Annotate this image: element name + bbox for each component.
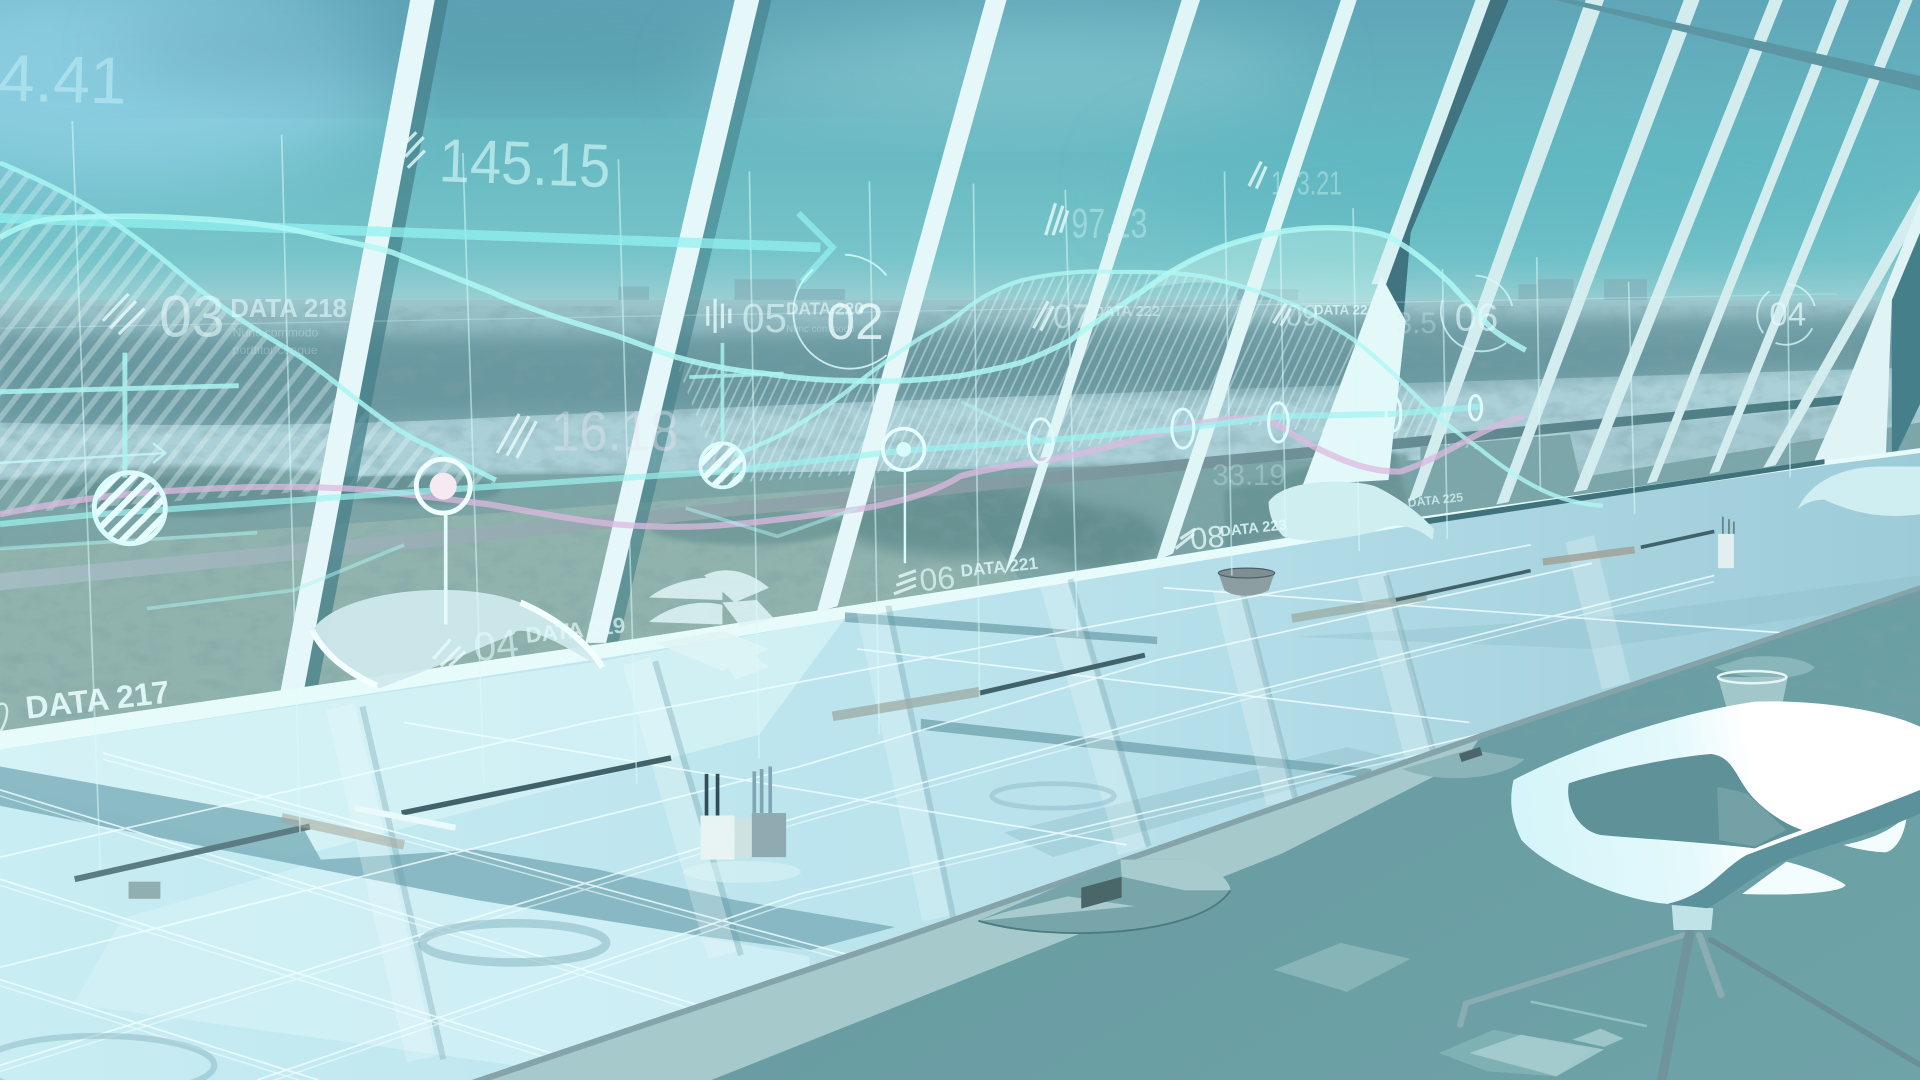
crosshair middle (689, 343, 784, 441)
label: 05 DATA 220: DATA 220 (786, 299, 864, 319)
circle gauge 04 (1757, 284, 1815, 345)
waste basket (1718, 671, 1788, 708)
node: hatched middle (700, 443, 744, 487)
label: 05 DATA 220 (742, 295, 864, 341)
readout: 33.19: 33.19 (1212, 459, 1286, 492)
table top (0, 448, 1920, 1080)
label: 04 DATA 219: DATA 219 (524, 613, 626, 648)
label: 06 DATA 221: 06 (918, 559, 957, 598)
falling curve (0, 163, 496, 480)
label: DATA 217: DATA 217 (24, 674, 171, 726)
chair opening (1568, 754, 1802, 848)
label: 04 DATA 219 (471, 613, 626, 670)
desk accessories: pen holders (683, 767, 801, 883)
table dark band (0, 767, 895, 950)
readout: 4.41: 4.41 (0, 41, 128, 119)
small nodes right (1029, 396, 1482, 463)
label: 06 DATA 221: DATA 221 (960, 553, 1039, 581)
readout: 173.21: 173.21 (1271, 166, 1342, 203)
gauge value 06: 06 (1455, 297, 1498, 340)
window rail (0, 396, 1843, 590)
label: 07 DATA 222: DATA 222 (1093, 304, 1160, 320)
wide diagonal lines (0, 402, 1041, 609)
label: 03 DATA 218: DATA 218 (230, 295, 347, 323)
hatched area under twin peaks (673, 272, 1480, 484)
table front edge band (471, 585, 1920, 1080)
label: 03 DATA 218: porttitor congue (233, 343, 318, 357)
label: 07 DATA 222: 07 (1053, 298, 1091, 336)
node: target middle (883, 429, 924, 563)
landscape view through the window (0, 0, 1920, 747)
chair middle (1269, 482, 1434, 541)
readout: 97.13: 97.13 (1071, 200, 1147, 247)
desk accessory: wire bowl (1218, 568, 1275, 596)
thin lines (0, 443, 165, 463)
table light plate (0, 618, 845, 857)
circle gauge 02 (793, 255, 887, 369)
top wave curve (0, 216, 1526, 381)
chair large foreground (1460, 701, 1920, 1080)
readout: 16.18: 16.18 (551, 400, 678, 463)
crosshair left (0, 353, 239, 478)
circle gauge 06 (1441, 276, 1512, 351)
label: 05 DATA 220: Nunc commodo (786, 324, 855, 335)
desk accessories: stacked paper trays (649, 570, 774, 680)
floor tiles reflections (1273, 943, 1647, 1076)
table reflected rings (422, 923, 606, 962)
label: DATA 217 (0, 674, 171, 741)
vertical guide lines (72, 121, 1790, 869)
chair far right (1798, 466, 1920, 516)
second wave curve (735, 272, 1603, 506)
label: 03 DATA 218: Nunc commodo (233, 326, 319, 340)
label: 05 DATA 220: 05 (742, 295, 787, 341)
gauge value 02: 02 (827, 292, 884, 350)
label: 07 DATA 222 (1053, 298, 1160, 336)
hatch marks beside numbers (103, 132, 1291, 666)
table cable slots (75, 531, 1714, 899)
arrow bar (0, 213, 833, 282)
chair seat fin (1742, 862, 1846, 895)
data overlay (0, 121, 1837, 869)
label: 03 DATA 218 (159, 285, 347, 357)
chair far left (312, 590, 602, 688)
gauge value 04: 04 (1769, 297, 1806, 334)
chair shell (1511, 701, 1920, 904)
label: 09 DATA 224 (1286, 300, 1375, 333)
table legs and disc feet (978, 656, 1815, 933)
basket seen through opening (1717, 787, 1786, 847)
table grid lines (0, 545, 1837, 1080)
horizontal guide line (0, 294, 1837, 328)
hatched area under falling curve (0, 163, 496, 514)
node: target ring (416, 459, 470, 624)
label: 08 DATA 223 (1189, 517, 1288, 557)
label: 06 DATA 221 (918, 553, 1039, 598)
window mullions (279, 0, 1920, 698)
label: 08 DATA 223: DATA 223 (1220, 517, 1288, 540)
chair back band (1668, 790, 1920, 908)
readout: 3.5: 3.5 (1396, 307, 1437, 340)
glass reflections of mullions (340, 539, 1616, 1059)
readout: 145.15: 145.15 (438, 126, 612, 200)
label: DATA 225: DATA 225 (1407, 490, 1464, 510)
chair right fin (1844, 815, 1907, 852)
label: 03 DATA 218: 03 (159, 285, 225, 350)
chair stem (1672, 905, 1713, 930)
node connector line (0, 407, 1480, 524)
chair legs (1460, 933, 1920, 1080)
light fill under second peak (1144, 228, 1389, 306)
label: 08 DATA 223: 08 (1189, 519, 1226, 557)
label: 09 DATA 224: DATA 224 (1314, 303, 1375, 318)
label: DATA 217: Nunc commodo porttitor (26, 710, 170, 741)
node: hatched left (94, 473, 165, 544)
label: 09 DATA 224: 09 (1286, 300, 1318, 333)
label: 04 DATA 219: 04 (471, 620, 521, 670)
pink wave curve (0, 416, 1523, 527)
desk accessory: far pen holder (1718, 517, 1734, 568)
